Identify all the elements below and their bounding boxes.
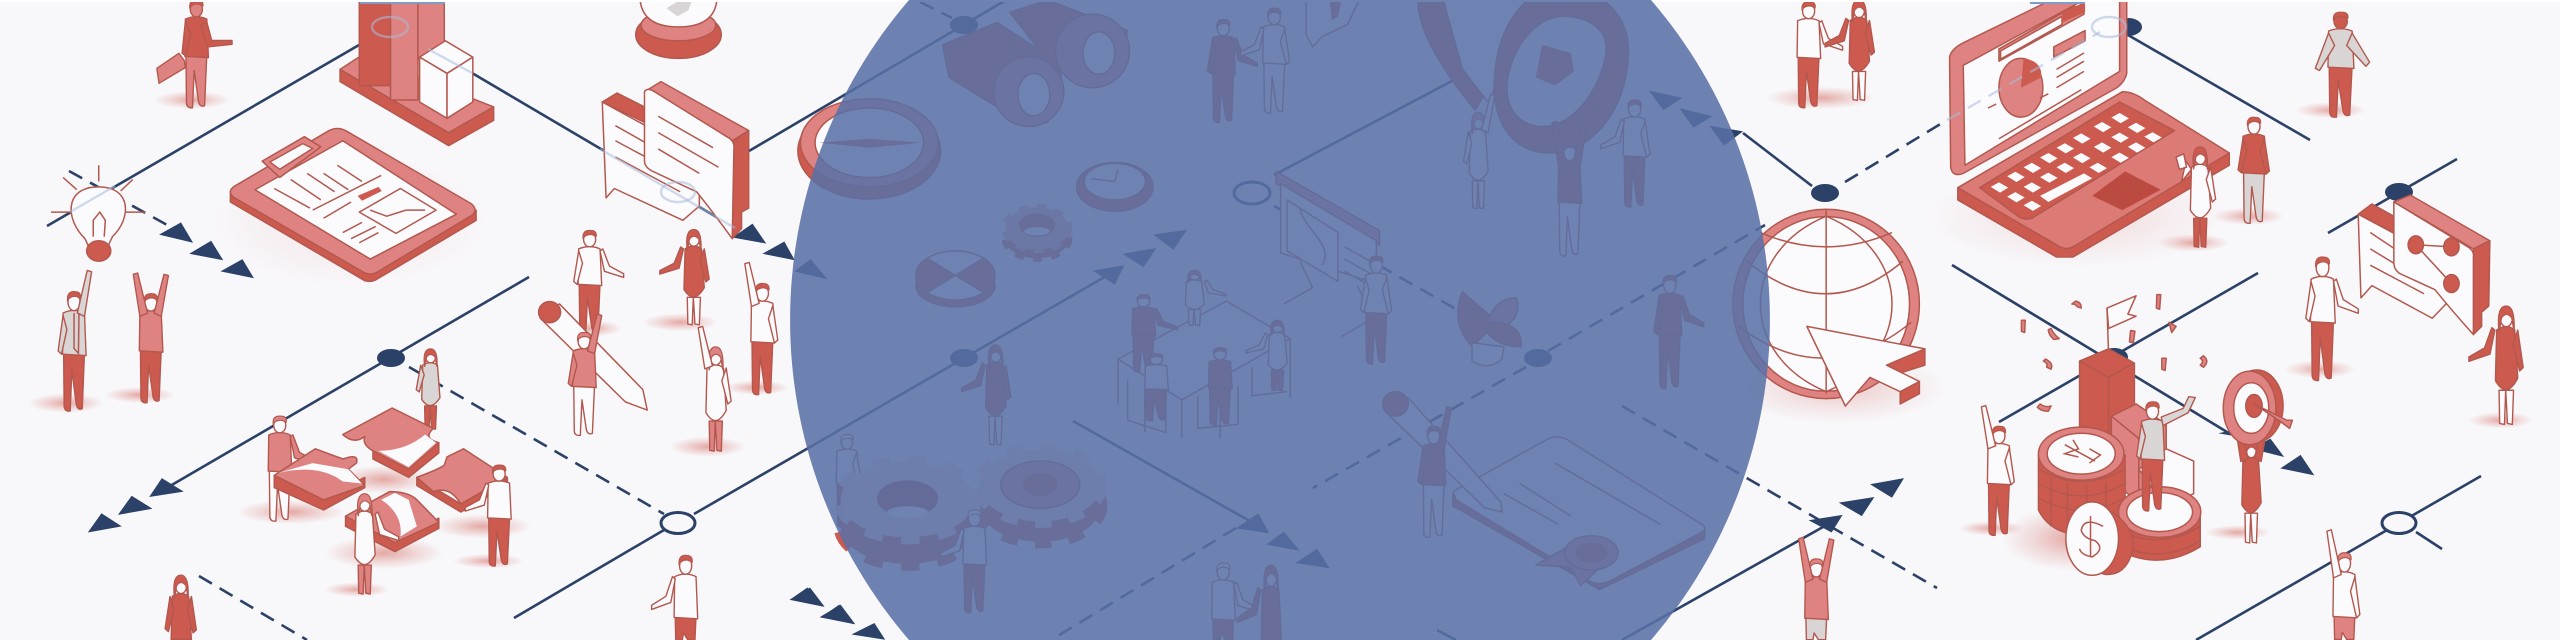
meeting table group <box>1118 270 1290 439</box>
clock <box>1077 162 1153 211</box>
right speech bubbles <box>2358 195 2490 335</box>
man in front of gears <box>941 510 987 613</box>
person with both arms raised <box>133 273 168 403</box>
target held by woman <box>2223 370 2292 543</box>
light bulb with rays <box>51 165 145 261</box>
speech bubbles <box>602 82 749 239</box>
shadows: right section <box>1727 86 2534 571</box>
people lifting magnifier <box>1464 95 1650 256</box>
man on coins <box>2137 397 2195 511</box>
crystal ball on base <box>636 0 721 58</box>
walking person <box>2315 12 2370 117</box>
person arms up, bottom <box>1799 537 1834 640</box>
right section illustrations <box>1727 0 2534 640</box>
centre section illustrations under circle <box>790 0 1743 640</box>
man right of table <box>1654 275 1704 389</box>
binoculars <box>943 0 1130 126</box>
laptop <box>1950 0 2229 257</box>
woman by laptop <box>2176 147 2216 247</box>
globe with cursor <box>1733 209 1925 406</box>
left section illustrations <box>27 0 855 640</box>
big magnifying glass <box>1418 0 1629 153</box>
man celebrating <box>1981 406 2014 535</box>
woman left of gears <box>962 345 1011 445</box>
shadows: left section <box>27 91 790 597</box>
woman waving, bottom <box>2327 530 2360 639</box>
small gear <box>1005 207 1069 258</box>
woman at bottom <box>165 575 196 639</box>
team assembling puzzle <box>268 349 511 594</box>
person walking with briefcase <box>157 0 232 108</box>
woman in red dress <box>660 230 709 325</box>
presenter at board <box>1360 256 1392 364</box>
large blue circle overlay <box>790 0 1770 640</box>
success column chart with flag and confetti <box>2021 295 2207 506</box>
handshake pair bottom <box>1212 563 1282 640</box>
man with arm raised <box>58 270 92 411</box>
arrows: right section <box>1809 428 2314 532</box>
man at bottom with tablet <box>652 555 698 640</box>
document with seal <box>1453 437 1705 590</box>
pencil and writer <box>1383 392 1502 538</box>
arrows: centre section <box>790 91 1743 640</box>
man with tablet <box>2306 257 2358 381</box>
coin stacks <box>2038 427 2201 575</box>
giant pencil <box>539 302 647 410</box>
arrows: left section <box>88 222 855 624</box>
compass <box>798 99 941 199</box>
man raising arm <box>745 262 778 395</box>
person carrying pencil <box>568 314 602 435</box>
handshake pair top <box>1207 8 1290 123</box>
network nodes <box>377 16 2416 534</box>
bar chart tower on plinth <box>340 0 494 146</box>
presentation board <box>1276 171 1380 337</box>
clipboard with charts <box>230 129 476 281</box>
woman raising arm <box>698 326 731 451</box>
man behind gear <box>836 434 861 527</box>
pie chart chip <box>916 251 995 307</box>
man holding tablet <box>574 230 624 333</box>
potted plant <box>1458 292 1521 366</box>
small speech bubble at top <box>1306 0 1359 47</box>
large gears <box>841 450 1101 564</box>
top edge slivers <box>0 0 2560 4</box>
woman in red dress right <box>2469 306 2523 424</box>
man by laptop <box>2238 117 2269 223</box>
faint lines seen through objects <box>70 17 2126 228</box>
handshake pair <box>1797 0 1874 108</box>
